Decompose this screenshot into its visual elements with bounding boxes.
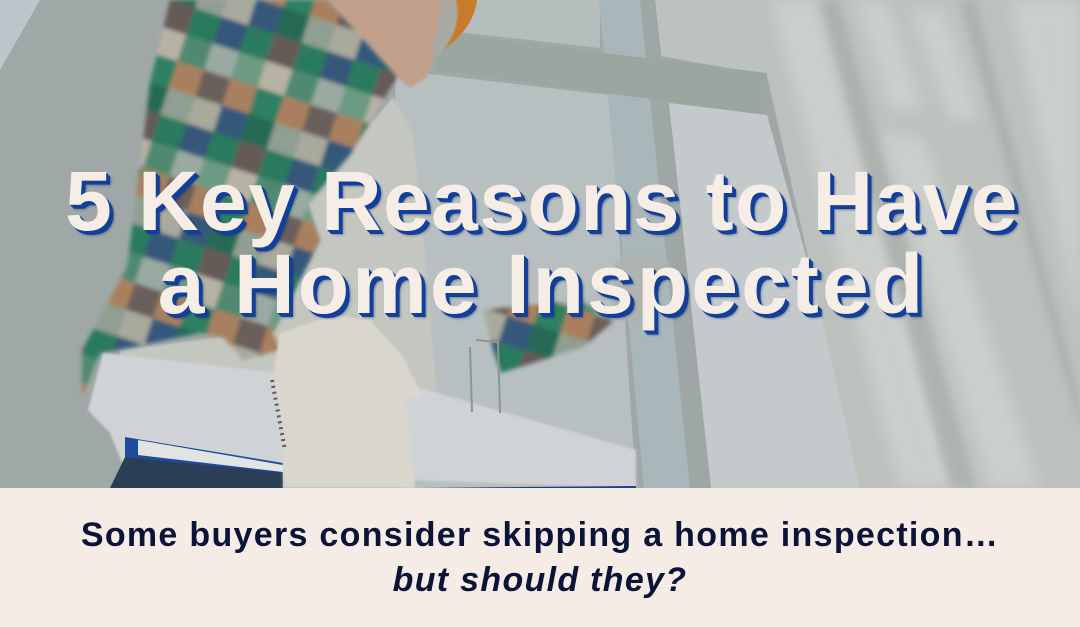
wall and window background — [0, 0, 1080, 488]
apron and torso — [120, 97, 437, 395]
title line 1: 5 Key Reasons to Have — [65, 154, 1019, 248]
clipboard with rolled plans — [88, 340, 636, 488]
background photo: inspector looking at a window from below — [0, 0, 1080, 488]
title line 2: a Home Inspected — [158, 237, 926, 331]
hard hat and face — [327, 0, 477, 88]
work glove — [272, 315, 423, 488]
subtitle line 1: Some buyers consider skipping a home inspection… — [81, 516, 999, 554]
title — [65, 154, 1020, 336]
plaid shirt — [82, 0, 615, 397]
bottom strip — [0, 488, 1080, 627]
subtitle line 2: but should they? — [393, 561, 687, 599]
far hand glove — [612, 254, 669, 320]
